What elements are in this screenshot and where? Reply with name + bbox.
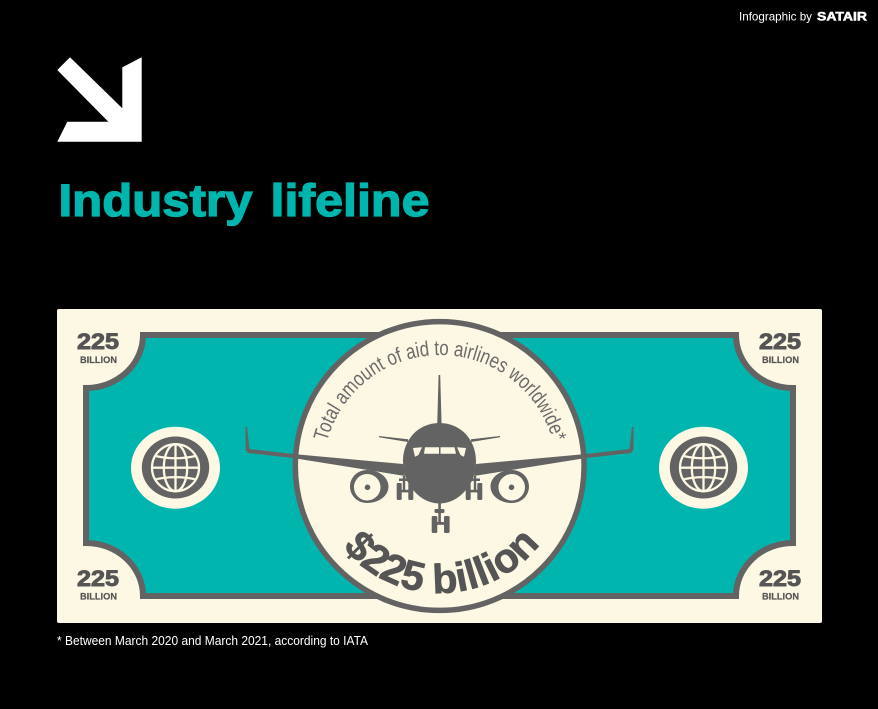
corner value: top right — [759, 329, 801, 365]
corner value: top right: BILLION — [762, 355, 799, 365]
footnote: * Between March 2020 and March 2021, according to IATA — [57, 634, 369, 648]
title — [58, 175, 430, 226]
banknote paper — [57, 309, 822, 623]
header credit: Infographic by — [739, 10, 812, 24]
title: Industry — [58, 175, 252, 226]
panel: banknote — [57, 309, 822, 623]
header credit: SATAIR — [817, 12, 868, 24]
icon: airplane front view — [246, 375, 634, 533]
banknote teal frame — [86, 335, 793, 596]
icon: arrow pointing down right — [57, 57, 142, 142]
fuselage — [403, 423, 476, 504]
right half details — [466, 427, 634, 503]
curved value: $225 billion: $225 billion — [346, 532, 540, 594]
header credit — [739, 10, 868, 24]
corner value: top left — [77, 329, 119, 365]
cockpit windows — [413, 447, 466, 457]
central medallion — [295, 322, 584, 610]
title: lifeline — [270, 175, 430, 226]
corner value: top left: 225 — [77, 329, 119, 354]
corner value: bottom left — [77, 566, 119, 601]
icon: left globe — [131, 427, 220, 509]
curved caption: total aid: Total amount of aid to airlines worldwide* — [313, 340, 566, 439]
corner value: bottom left: BILLION — [80, 591, 117, 601]
icon: right globe — [659, 427, 748, 509]
left half details — [246, 427, 413, 503]
corner value: bottom left: 225 — [77, 566, 119, 591]
corner value: bottom right: 225 — [759, 566, 801, 591]
nose gear — [432, 503, 450, 533]
corner value: bottom right: BILLION — [762, 591, 799, 601]
tail fin — [437, 375, 442, 425]
corner value: bottom right — [759, 566, 801, 601]
corner value: top left: BILLION — [80, 355, 117, 365]
corner value: top right: 225 — [759, 329, 801, 354]
